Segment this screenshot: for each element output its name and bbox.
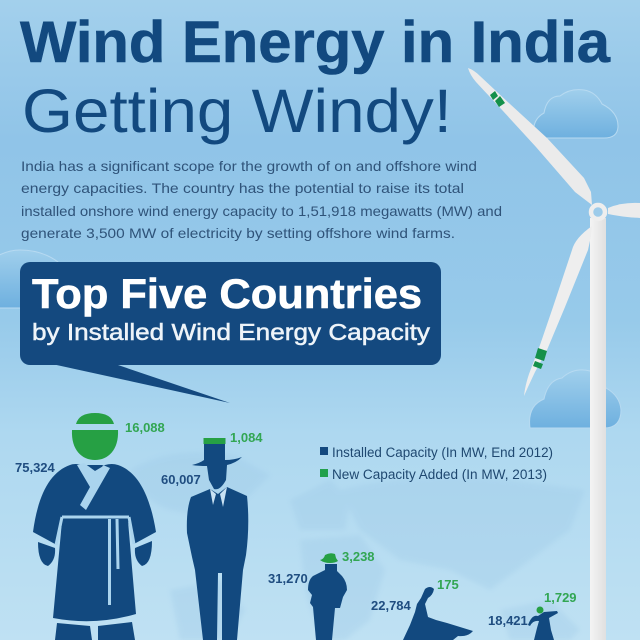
intro paragraph: energy capacities. The country has the potential to raise its total xyxy=(21,181,464,196)
hands xyxy=(38,541,152,566)
intro paragraph: generate 3,500 MW of electricity by setting offshore wind farms. xyxy=(21,226,455,241)
value: 75,324: 75,324 xyxy=(15,460,56,475)
title: Wind Energy in India xyxy=(20,10,611,75)
robe waist xyxy=(56,517,134,605)
suit xyxy=(187,487,248,640)
turbine tower xyxy=(590,218,606,640)
turbine blade: upper xyxy=(468,68,592,205)
robe collar xyxy=(77,463,110,510)
wind turbine xyxy=(468,68,640,640)
hat and head xyxy=(192,444,242,489)
value: 31,270: 31,270 xyxy=(268,571,308,586)
figure 3: man with green hat xyxy=(308,553,347,640)
installed values xyxy=(15,460,528,628)
hat band green xyxy=(204,438,226,444)
cloud: left edge xyxy=(0,250,62,308)
intro paragraph: India has a significant scope for the growth of on and offshore wind xyxy=(21,159,477,174)
legend: new: New Capacity Added (In MW, 2013) xyxy=(332,467,547,482)
banner panel xyxy=(20,262,441,365)
intro paragraph xyxy=(21,159,502,241)
body xyxy=(308,564,347,640)
body xyxy=(528,611,558,640)
intro paragraph: installed onshore wind energy capacity to 1,51,918 megawatts (MW) and xyxy=(21,204,502,219)
turbine blade: right xyxy=(608,203,640,218)
value: 1,084: 1,084 xyxy=(230,430,263,445)
value: 22,784: 22,784 xyxy=(371,598,412,613)
figure 4: dancer in wide skirt xyxy=(403,587,473,640)
turbine blade: lower xyxy=(524,226,592,396)
legs xyxy=(55,622,135,640)
banner subheading: by Installed Wind Energy Capacity xyxy=(32,319,430,345)
speech banner xyxy=(20,262,441,403)
robe xyxy=(33,464,156,621)
figure 2: suit and hat xyxy=(187,438,248,640)
cloud: lower right xyxy=(530,370,621,428)
hat green xyxy=(320,553,338,563)
legend xyxy=(320,445,553,482)
banner heading: Top Five Countries xyxy=(32,270,422,317)
figure 5: dancer with raised arms xyxy=(528,606,558,640)
turbine hub xyxy=(591,205,605,219)
blade bands lower xyxy=(533,348,547,369)
world map backdrop xyxy=(130,452,585,640)
head green xyxy=(72,413,118,460)
banner tail xyxy=(52,364,230,403)
value: 3,238: 3,238 xyxy=(342,549,375,564)
hair green xyxy=(536,606,544,614)
value: 175: 175 xyxy=(437,577,459,592)
legend: installed: Installed Capacity (In MW, End 2012) xyxy=(332,445,553,460)
subtitle: Getting Windy! xyxy=(22,77,452,145)
figure 1: Korean dress xyxy=(33,413,156,640)
cloud: top right xyxy=(533,90,618,138)
new capacity values xyxy=(125,420,577,605)
value: 18,421: 18,421 xyxy=(488,613,528,628)
value: 1,729: 1,729 xyxy=(544,590,577,605)
shirt xyxy=(210,487,227,507)
blade bands upper xyxy=(490,91,505,107)
value: 16,088: 16,088 xyxy=(125,420,165,435)
value: 60,007: 60,007 xyxy=(161,472,201,487)
